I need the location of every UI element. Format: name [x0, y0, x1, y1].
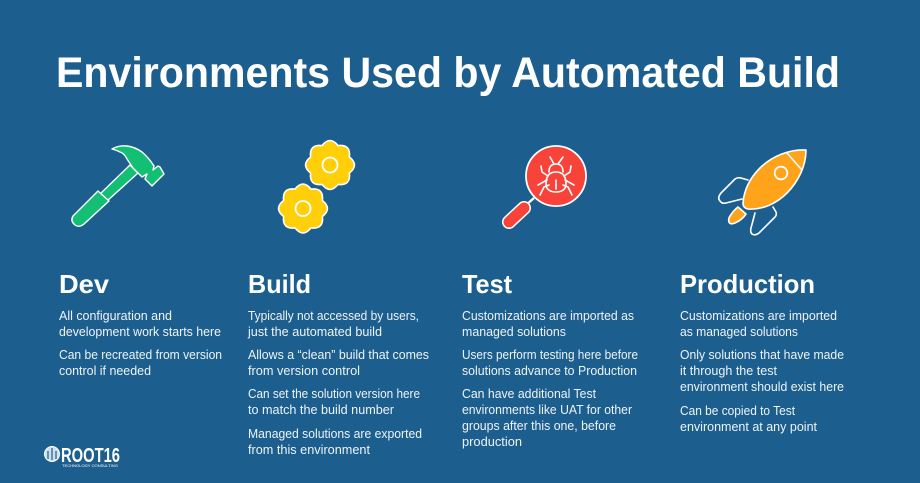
text: Dev bullets: control if needed: [59, 364, 151, 378]
text: Build bullets: from this environment: [248, 443, 371, 457]
text: Test bullets: Users perform testing here before: [462, 348, 638, 362]
text: Dev bullets: Can be recreated from version: [59, 348, 222, 362]
icon: hammer: [72, 146, 164, 226]
text: Build bullets: Can set the solution version here: [248, 387, 420, 401]
text: Dev bullets: [59, 309, 222, 378]
text: Production bullets: Customizations are imported: [680, 309, 837, 323]
column: Build: [247, 269, 429, 457]
heading: Test: Test: [462, 269, 512, 299]
column: Production: [680, 269, 844, 434]
icon: bug: [538, 157, 574, 195]
text: Build bullets: Allows a “clean” build that comes: [248, 348, 429, 362]
text: Production bullets: as managed solutions: [680, 325, 798, 339]
text: Build bullets: just the automated build: [247, 325, 382, 339]
heading: Dev: Dev: [59, 269, 110, 299]
text: Build bullets: from version control: [248, 364, 360, 378]
text: Dev bullets: All configuration and: [59, 309, 172, 323]
text: Build bullets: Managed solutions are exported: [248, 427, 422, 441]
icon: lower gear: [279, 184, 327, 233]
text: Production bullets: it through the test: [680, 364, 778, 378]
text: Production bullets: Only solutions that have made: [680, 348, 844, 362]
text: Production bullets: Can be copied to Test: [680, 404, 795, 418]
icon: upper gear: [306, 141, 354, 189]
text: Build bullets: [247, 309, 429, 457]
icon: gears: [279, 141, 354, 233]
logo: Root16: TECHNOLOGY CONSULTING: [62, 463, 118, 468]
text: Test bullets: managed solutions: [462, 325, 566, 339]
logo: Root16: [44, 445, 120, 468]
text: Test bullets: Can have additional Test: [462, 387, 597, 401]
logo: Root16: ROOT16: [61, 445, 120, 467]
text: Test bullets: [462, 309, 638, 449]
icon: rocket: [719, 150, 806, 235]
text: Test bullets: groups after this one, before: [462, 419, 616, 433]
icon: magnifier with bug: [509, 146, 586, 222]
title: Environments Used by Automated Build: [56, 49, 840, 97]
text: Dev bullets: development work starts here: [59, 325, 221, 339]
text: Test bullets: production: [462, 435, 522, 449]
column: Dev: [59, 269, 222, 378]
heading: Build: Build: [248, 269, 311, 299]
text: Test bullets: Customizations are imported as: [462, 309, 634, 323]
text: Production bullets: environment should exist here: [680, 380, 844, 394]
text: Production bullets: environment at any point: [680, 420, 818, 434]
text: Test bullets: solutions advance to Production: [462, 364, 637, 378]
text: Build bullets: to match the build number: [248, 403, 394, 417]
text: Test bullets: environments like UAT for other: [462, 403, 632, 417]
column: Test: [462, 269, 638, 449]
heading: Production: Production: [680, 269, 815, 299]
text: Production bullets: [680, 309, 844, 434]
text: Build bullets: Typically not accessed by users,: [248, 309, 419, 323]
